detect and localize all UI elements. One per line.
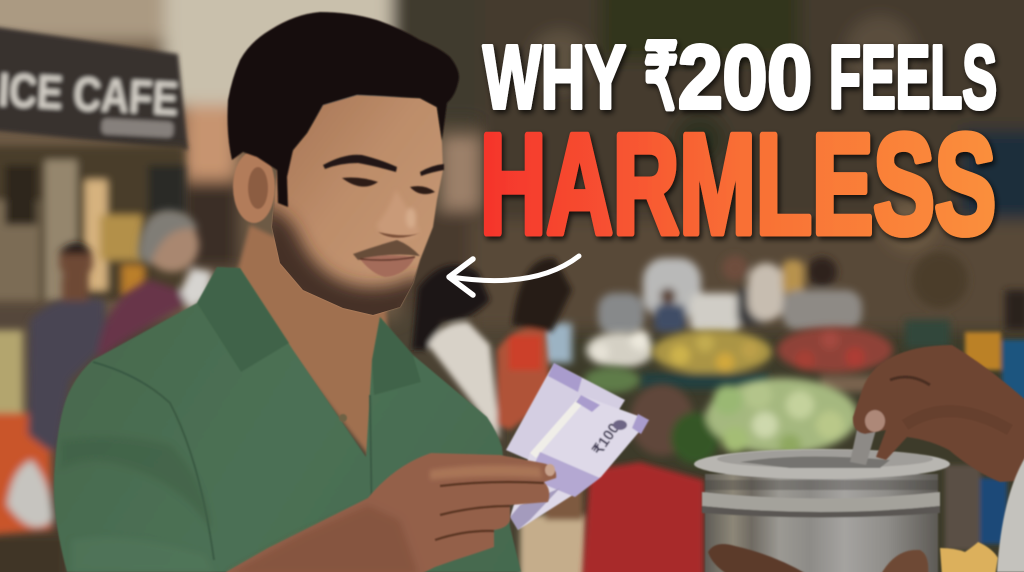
man in grey shirt [28,298,105,450]
shirt [54,267,521,572]
ear [233,151,275,223]
orange and blue right edge [945,332,1024,550]
title line 1: 200 [678,28,812,128]
vendor's hand dropping coin [850,345,1024,482]
white bag [7,460,53,527]
cauliflower pile [586,330,654,368]
green vegetable pile [584,367,858,464]
coin [850,425,876,465]
rupee notes [506,363,649,530]
fried snack [940,542,998,572]
blurred bystanders centre [412,258,586,572]
title line 1 [483,28,997,128]
eyebrow right [420,164,444,176]
shop sign: ICE CAFE: ICE CAFE [0,64,180,126]
left collar [197,267,289,372]
shirt placket [370,395,372,530]
blurred crowd behind stalls [542,252,1024,363]
vegetable and fruit stalls [582,327,1024,572]
vendor's white sleeve [997,456,1024,572]
man's forearm and hand holding notes [226,453,556,572]
mouth [360,255,415,277]
vendor's lower hand [708,544,928,572]
eye left [342,178,378,187]
title line 1: ₹ [644,28,678,128]
man in green shirt [54,12,521,572]
front note [510,395,649,530]
sleeve seam [93,362,214,560]
red fruit pile [777,327,893,392]
back note [506,363,625,480]
thumb nail [865,410,885,432]
tin lid [694,449,950,479]
hair [228,12,459,207]
tin band [702,492,940,512]
note denomination: ₹100 [589,420,623,458]
face [271,94,445,316]
yellow fruit pile [640,330,772,389]
shirt button [339,414,347,422]
moustache [353,240,420,260]
nose [377,190,420,240]
steel tin [694,449,950,572]
eye right [410,186,435,194]
storefront below sign [0,146,186,301]
sleeve fold [60,436,212,530]
blurred bystanders left [0,210,212,535]
title [480,28,997,264]
eyebrow left [323,155,397,172]
red table cloth [582,462,704,572]
market goods far left [0,330,23,415]
man in maroon shirt [98,280,185,360]
neck [235,225,388,460]
orange crate [0,413,52,535]
shop sign: ICE CAFE [0,26,188,150]
title line 1: WHY [483,28,626,128]
stubble [272,200,418,315]
arrow pointing to the man [449,256,579,295]
right collar [372,317,421,395]
